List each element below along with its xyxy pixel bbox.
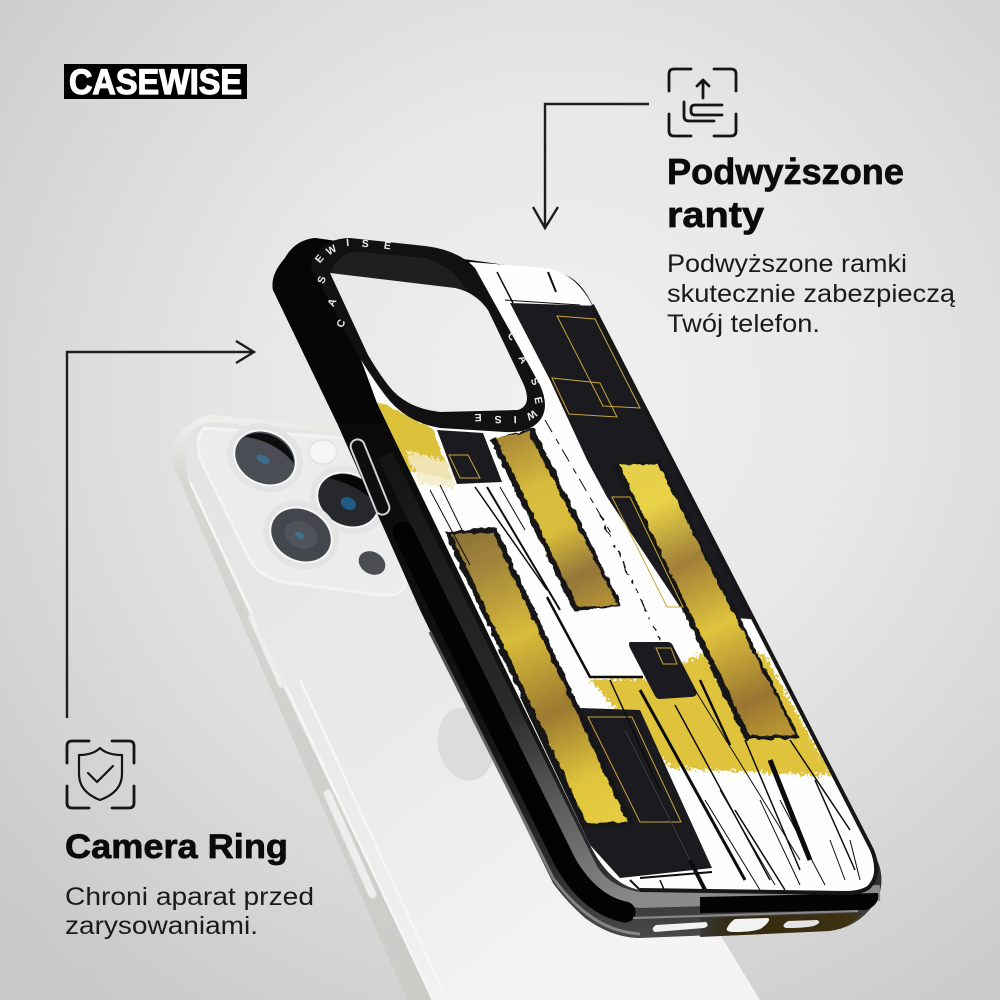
- ring lettering: C: [505, 331, 519, 343]
- icon: raised edges: [669, 69, 736, 136]
- gold strip left: [444, 527, 634, 828]
- black phone case: [272, 238, 882, 938]
- text: camera ring description: [65, 883, 314, 940]
- logo: CASEWISE: [69, 63, 242, 102]
- gold strip right: [613, 460, 800, 740]
- white phone: [172, 411, 760, 1000]
- side groove: [403, 532, 625, 912]
- ring lettering: S: [528, 376, 542, 387]
- apple logo: [431, 702, 501, 786]
- ring lettering: A: [325, 296, 340, 309]
- left edge highlight: [430, 632, 640, 934]
- printed case artwork: [360, 262, 874, 891]
- ring lettering: E: [313, 253, 327, 266]
- text: raised edges description: Twój telefon.: [667, 310, 820, 338]
- ring lettering: [313, 237, 544, 425]
- speaker hole left: [653, 922, 708, 932]
- bottom light strip: [633, 911, 858, 918]
- text: camera ring description: zarysowaniami.: [65, 912, 258, 940]
- text: raised edges description: Podwyższone ramki: [667, 250, 907, 278]
- icon: shield: [67, 741, 134, 808]
- black square lower: [629, 642, 697, 699]
- gold outline lower square: [656, 648, 677, 664]
- arrow to raised edges: [533, 104, 649, 228]
- ring lettering: C: [334, 317, 349, 330]
- heading: raised edges: ranty: [667, 194, 764, 235]
- ring lettering: W: [324, 243, 339, 258]
- heading: raised edges: Podwyższone: [667, 151, 904, 192]
- lens three: [251, 488, 351, 582]
- brush scratches: [430, 272, 860, 892]
- ring lettering: E: [383, 240, 392, 252]
- lens one: [215, 411, 315, 505]
- port hole: [727, 918, 769, 932]
- phone edge highlights: [190, 482, 447, 1000]
- ring lettering: I: [346, 237, 350, 249]
- print glass edge: [592, 305, 876, 893]
- black square upper: [437, 430, 502, 484]
- heading: camera ring: Camera Ring: [65, 828, 288, 866]
- side button lower: [322, 788, 378, 900]
- ring lettering: I: [513, 413, 517, 425]
- camera plateau: [198, 428, 405, 595]
- yellow corner patch: [375, 400, 452, 480]
- lower white flakes: [670, 775, 835, 800]
- case upper black section: [272, 238, 470, 424]
- black lower left area: [520, 690, 712, 878]
- top black block: [510, 303, 765, 620]
- ring lettering: E: [474, 411, 482, 423]
- ring window: [330, 273, 527, 412]
- text: raised edges description: skutecznie zabezpieczą: [667, 280, 955, 308]
- bottom gold tinted side: [700, 913, 862, 937]
- flash: [309, 440, 337, 464]
- ring lettering: W: [524, 407, 539, 422]
- heading: raised edges: [667, 151, 904, 235]
- camera ring: [311, 237, 545, 432]
- gold outlines: [552, 316, 683, 822]
- ring lettering: S: [494, 413, 502, 425]
- ring lettering: S: [315, 275, 329, 285]
- ring inner wall: [330, 252, 467, 290]
- volume button slot: [349, 437, 391, 517]
- arrow to camera ring: [67, 341, 254, 718]
- gold strip middle: [490, 428, 622, 611]
- top flakes: [405, 450, 456, 488]
- yellow lower band: [590, 655, 832, 776]
- side button upper: [247, 613, 285, 689]
- lidar: [354, 546, 390, 580]
- lens two: [298, 453, 398, 547]
- ring lettering: A: [516, 354, 530, 366]
- bottom black band: [700, 893, 878, 913]
- text: raised edges description: [667, 250, 955, 338]
- text: camera ring description: Chroni aparat przed: [65, 883, 314, 911]
- ring lettering: E: [531, 396, 544, 405]
- speaker hole right: [783, 920, 819, 928]
- phone back face: [186, 422, 760, 1000]
- side rim: [385, 455, 880, 900]
- gold outline upper square: [449, 455, 480, 478]
- ring lettering: S: [361, 238, 369, 250]
